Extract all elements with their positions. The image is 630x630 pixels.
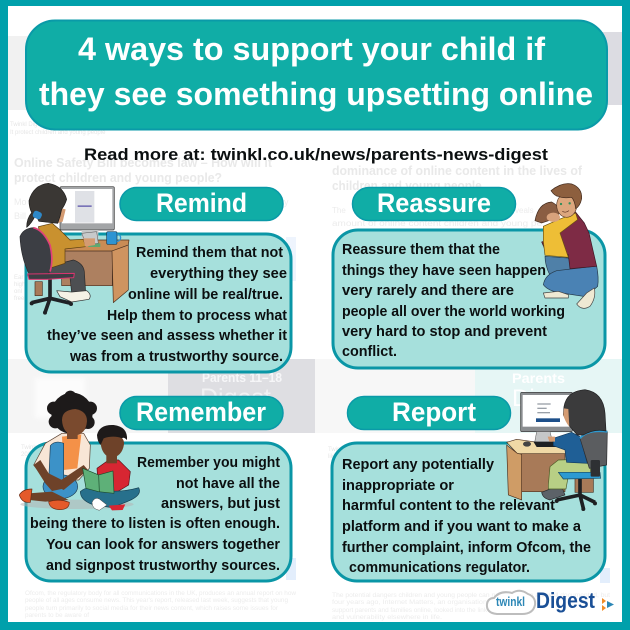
- panel: remind: they’ve seen and assess whether it: [47, 328, 287, 344]
- faded background article: four years ago, Internet Matters, an organisation: [332, 599, 487, 606]
- panel: remind: [26, 234, 291, 372]
- faded background article: and vulnerability elsewhere in life.: [332, 614, 442, 621]
- faded background article: Ofcom, the regulatory body for all communications in the UK, produces an annual report on how: [25, 590, 296, 597]
- heading pill: report: [348, 396, 510, 430]
- heading pill: remind: [120, 188, 283, 220]
- panel: remind: online will be real/true.: [128, 287, 283, 303]
- panel: remember: Remember you might: [137, 455, 280, 471]
- panel: remind: Remind them that not: [136, 245, 283, 261]
- panel: remember: being there to listen is often enough.: [30, 516, 280, 532]
- heading pill: reassure: [352, 188, 516, 220]
- faded background article: parents to be aware of: [25, 612, 89, 619]
- faded background article: Twink: [21, 445, 37, 451]
- panel: report: further complaint, inform Ofcom, the: [342, 540, 591, 556]
- heading pill: reassure: Reassure: [377, 188, 491, 218]
- faded background article: high: [14, 282, 25, 288]
- faded background article: Bill: [14, 211, 26, 221]
- panel: report: inappropriate or: [342, 478, 454, 494]
- panel: report: [332, 443, 605, 581]
- illustration: parent hugging child: [535, 184, 598, 308]
- panel: reassure: [333, 230, 605, 368]
- faded background article: Mo: [14, 197, 27, 207]
- panel: report: platform and if you want to make a: [342, 519, 582, 535]
- title banner: 4 ways to support your child if: [78, 31, 545, 67]
- logo: twinkl Digest: twinkl: [496, 594, 525, 609]
- illustration: woman at computer: [20, 183, 129, 315]
- panel: remind: Help them to process what: [107, 308, 287, 324]
- panel: remember: [26, 443, 291, 581]
- heading pill: remember: Remember: [136, 397, 266, 427]
- heading pill: remind: Remind: [156, 188, 247, 218]
- faded background article: children and young people.: [332, 178, 485, 193]
- faded background article: Parents 11–18: [202, 370, 282, 385]
- panel: remember: not have all the: [176, 476, 280, 492]
- faded background article: y: [284, 197, 289, 207]
- illustration: mother and son reading: [19, 391, 140, 510]
- title banner: they see something upsetting online: [39, 76, 593, 112]
- panel: reassure: very rarely and there are: [342, 283, 514, 299]
- faded background article: onl: [14, 289, 22, 295]
- faded background article: Digest: [200, 384, 271, 412]
- faded background article: support parents and families online, looked into the link: [332, 607, 488, 614]
- logo: twinkl Digest: [487, 588, 614, 614]
- faded background article: people turn primarily to social media for their news content, which raises some issues for: [25, 605, 279, 612]
- faded background article: The potential dangers children and young people can run into online are well documented, but: [332, 592, 610, 599]
- faded background article: dominance of online content in the lives of: [332, 163, 583, 178]
- faded background article: protect children and young people?: [14, 170, 222, 185]
- panel: reassure: Reassure them that the: [342, 242, 500, 258]
- faded background article: Online Safety Bill becomes law – How will it: [14, 155, 273, 170]
- faded background article: Digest: [512, 385, 580, 412]
- faded background article: veals: [515, 206, 534, 215]
- faded background article: amount of online content children and young pe: [332, 219, 543, 228]
- faded background article: Twink: [328, 447, 344, 453]
- title banner: [26, 20, 607, 130]
- panel: remind: was from a trustworthy source.: [69, 349, 283, 365]
- faded background article: free: [14, 296, 25, 302]
- heading pill: report: Report: [392, 397, 476, 427]
- faded background article: 2023: [21, 452, 35, 458]
- panel: reassure: people all over the world working: [342, 304, 565, 320]
- panel: reassure: conflict.: [342, 344, 397, 360]
- logo: twinkl Digest: Digest: [536, 588, 596, 613]
- panel: report: harmful content to the relevant: [342, 498, 555, 514]
- read more link: Read more at: twinkl.co.uk/news/parents-news-digest: [84, 145, 548, 164]
- faded background article: Ear: [14, 275, 23, 281]
- faded background article: people of all ages consume news. This year's report, released last week, suggests that young: [25, 597, 288, 604]
- illustration: woman reporting at computer: [507, 390, 607, 511]
- faded background article: Twinkl Digest: [10, 122, 46, 128]
- panel: reassure: things they have seen happen: [342, 263, 546, 279]
- panel: remember: and signpost trustworthy sources.: [46, 558, 280, 574]
- panel: reassure: very hard to stop and prevent: [342, 324, 547, 340]
- panel: report: communications regulator.: [349, 560, 530, 576]
- panel: remind: everything they see: [150, 266, 287, 282]
- panel: remember: answers, but just: [161, 496, 280, 512]
- faded background article: like: [328, 454, 338, 460]
- faded background article: It protect children and young people: [10, 130, 106, 136]
- panel: report: Report any potentially: [342, 457, 494, 473]
- faded background article: The: [332, 206, 346, 215]
- faded background article: Parents: [512, 370, 565, 386]
- panel: remember: You can look for answers together: [46, 537, 280, 553]
